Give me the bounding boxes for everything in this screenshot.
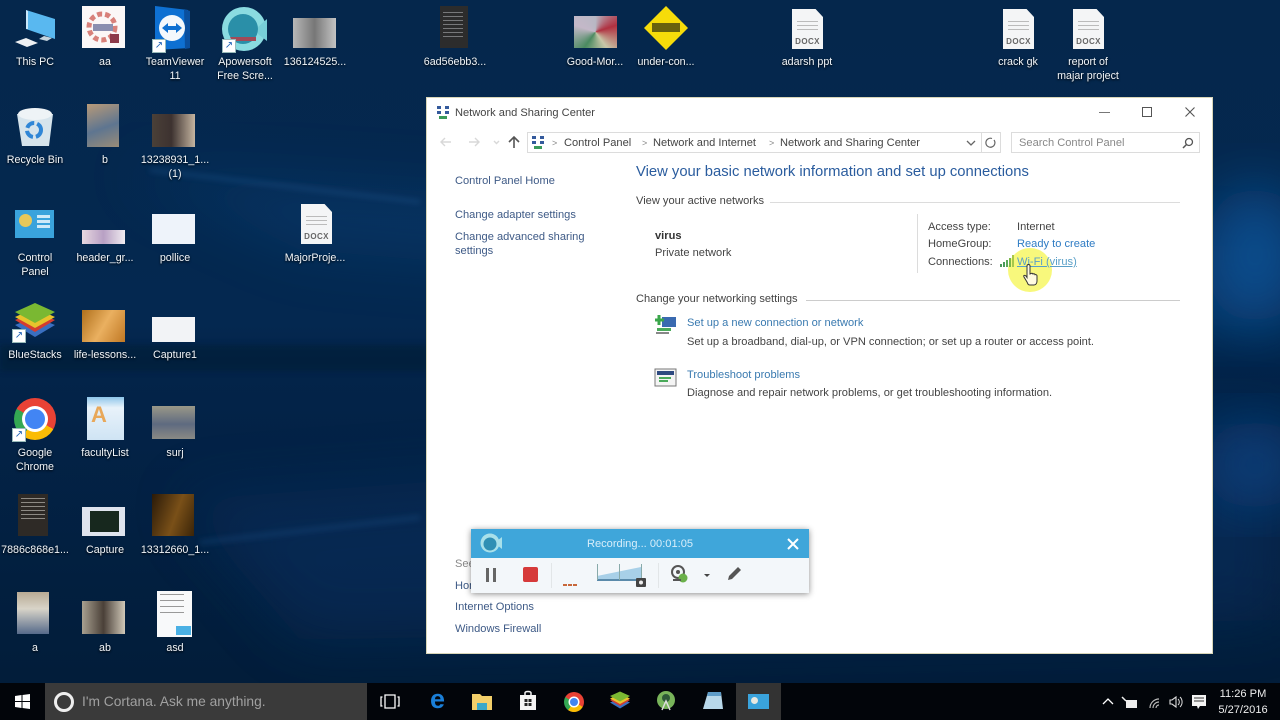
network details: Connections: (928, 256, 993, 268)
desktop icon: pollice screenshot: pollice (160, 252, 190, 264)
desktop icon: 13238931 photo (141, 114, 209, 181)
cursor highlight (1008, 248, 1052, 292)
see also links: Windows Firewall (455, 623, 541, 635)
side navigation links: Change advanced sharing (455, 231, 585, 243)
desktop icon: Recycle Bin (6, 108, 64, 167)
desktop icon: Apowersoft Free Screen (216, 7, 273, 82)
desktop icon: Control Panel: Panel (21, 266, 49, 278)
icon: troubleshoot (654, 368, 676, 386)
side navigation links: Control Panel Home (455, 175, 555, 187)
setting: troubleshoot problems: Diagnose and repair network problems, or get troubleshooting information. (687, 387, 1052, 399)
icon: bluestacks (610, 691, 630, 711)
desktop icon: 13238931 photo: 13238931_1... (141, 154, 209, 166)
desktop icon: Google Chrome: ↗ (15, 429, 23, 440)
side navigation links (455, 175, 585, 257)
address bar breadcrumb: Control Panel (564, 137, 631, 149)
search box (1011, 132, 1200, 153)
desktop icon: header_gr image (76, 230, 134, 266)
address bar breadcrumb: > (769, 138, 774, 148)
icon: edge browser: e (430, 684, 445, 714)
address bar breadcrumb: Network and Sharing Center (780, 137, 920, 149)
desktop icon: Control Panel: Control (18, 252, 52, 264)
desktop icon: TeamViewer 11: ↗ (155, 40, 163, 51)
desktop icon: facultyList: A (91, 402, 107, 427)
icon: file explorer (472, 692, 492, 710)
setting: set up a new connection (687, 317, 1094, 348)
desktop icon: facultyList (80, 397, 129, 460)
recorder title bar (471, 529, 809, 558)
taskbar (0, 683, 1280, 720)
network details (917, 214, 1095, 273)
icon: store (519, 690, 537, 711)
desktop icon: Good-Morning image (566, 16, 623, 68)
desktop icon: adarsh ppt document: DOCX (795, 37, 820, 46)
desktop icon: Apowersoft Free Screen: Free Scre... (217, 70, 273, 82)
desktop icon: Recycle Bin: Recycle Bin (7, 154, 63, 166)
desktop icon: report of majar project document: DOCX (1076, 37, 1101, 46)
section heading: active networks: View your active networks (636, 195, 764, 207)
desktop icon: life-lessons image: life-lessons... (74, 349, 136, 361)
active network name: virus (655, 230, 682, 242)
desktop icon: a photo: a (32, 642, 38, 654)
desktop icon: Capture screenshot: Capture (86, 544, 124, 556)
desktop icon: This PC: This PC (16, 56, 54, 68)
icon: task view (380, 694, 400, 709)
see also links: See also (455, 558, 498, 570)
desktop icon: 13312660 image (141, 494, 209, 557)
desktop icon: a photo (17, 592, 49, 654)
address bar breadcrumb: Network and Internet (653, 137, 756, 149)
desktop icon: BlueStacks (8, 303, 62, 361)
see also links (455, 554, 605, 636)
icon: control panel active task (736, 683, 781, 720)
side navigation links: Change adapter settings (455, 209, 576, 221)
desktop icon: ab photo: ab (99, 642, 111, 654)
desktop icon: BlueStacks: BlueStacks (8, 349, 62, 361)
desktop icon: Capture1 screenshot: Capture1 (153, 349, 197, 361)
desktop icon: Capture screenshot (82, 507, 125, 557)
side navigation links: settings (455, 245, 493, 257)
icon: notes app (702, 691, 723, 711)
desktop icon: 136124525 photo (284, 18, 346, 68)
desktop icon: 6ad56ebb3 image (423, 6, 486, 68)
see also links: HomeGroup (455, 580, 515, 592)
desktop icon: adarsh ppt document (781, 9, 832, 69)
network details: Ready to create (1017, 238, 1095, 250)
search box: Search Control Panel (1019, 137, 1124, 149)
clock: 5/27/2016 (1218, 704, 1268, 716)
panel: Network and Sharing Center window (426, 97, 1213, 654)
setting: troubleshoot problems (687, 369, 1052, 399)
network details: Internet (1017, 221, 1055, 233)
desktop icon: under-construction sign (637, 6, 695, 68)
desktop icon: asd document (157, 591, 192, 654)
recorder controls (471, 558, 809, 593)
desktop icon: TeamViewer 11: TeamViewer (146, 56, 204, 68)
desktop icon: crack gk document (998, 9, 1038, 70)
desktop icon: facultyList: facultyList (81, 447, 129, 459)
desktop icon: 136124525 photo: 136124525... (284, 56, 346, 68)
desktop icon: crack gk document: DOCX (1006, 37, 1031, 46)
address bar breadcrumb: > (552, 138, 557, 148)
desktop icon: adarsh ppt document: adarsh ppt (782, 56, 832, 68)
icon: start button (15, 694, 30, 709)
desktop icon: 7886c868e1 image: 7886c868e1... (1, 544, 69, 556)
setting: troubleshoot problems: Troubleshoot problems (687, 369, 800, 381)
network details: HomeGroup: (928, 238, 992, 250)
address bar breadcrumb (527, 132, 1001, 153)
desktop icon: Apowersoft Free Screen: Apowersoft (218, 56, 272, 68)
desktop icon: BlueStacks: ↗ (15, 330, 23, 341)
desktop icon: b photo (87, 104, 119, 166)
desktop icon: Google Chrome: Chrome (16, 461, 54, 473)
desktop icon: under-construction sign: under-con... (637, 56, 695, 68)
icon: wifi signal (1000, 255, 1014, 267)
desktop icon: header_gr image: header_gr... (76, 252, 134, 264)
network details: Access type: (928, 221, 991, 233)
desktop icon: 13238931 photo: (1) (168, 168, 182, 180)
desktop icon: surj photo: surj (166, 447, 184, 459)
desktop icon: life-lessons image (74, 310, 136, 361)
desktop icon: 13312660 image: 13312660_1... (141, 544, 209, 556)
see also links: Internet Options (455, 601, 534, 613)
desktop icon: MajorProject document: DOCX (304, 232, 329, 241)
desktop icon: crack gk document: crack gk (998, 56, 1038, 68)
desktop icon: TeamViewer 11: 11 (169, 70, 181, 82)
icon: new connection (655, 315, 676, 334)
desktop icon: b photo: b (102, 154, 108, 166)
desktop icon: ab photo (82, 601, 125, 654)
address bar breadcrumb: > (642, 138, 647, 148)
desktop icon: asd document: asd (166, 642, 184, 654)
cortana search box: I'm Cortana. Ask me anything. (82, 694, 266, 709)
navigation arrows (440, 136, 520, 148)
desktop icon: 6ad56ebb3 image: 6ad56ebb3... (424, 56, 486, 68)
desktop icon: report of majar project document: report of (1068, 56, 1108, 68)
setting: set up a new connection: Set up a broadband, dial-up, or VPN connection; or set up a router or access point. (687, 336, 1094, 348)
desktop icon: Google Chrome: Google (18, 447, 52, 459)
active network name (655, 230, 732, 259)
section heading: networking settings: Change your networking settings (636, 293, 798, 305)
desktop icon: surj photo (152, 406, 195, 460)
desktop icon: aa (82, 6, 125, 68)
window title with icon: Network and Sharing Center (455, 107, 595, 119)
desktop icon: Good-Morning image: Good-Mor... (567, 56, 623, 68)
window controls (1099, 107, 1195, 117)
icon: hand cursor (1023, 264, 1038, 286)
panel: screen recorder toolbar (471, 529, 809, 593)
desktop icon: TeamViewer 11 (146, 6, 204, 82)
system tray icons (1100, 693, 1210, 711)
desktop icon: aa: aa (99, 56, 111, 68)
desktop icon: 7886c868e1 image (1, 494, 69, 556)
desktop icon: report of majar project document (1056, 9, 1120, 84)
desktop icon: MajorProject document: MajorProje... (285, 252, 345, 264)
desktop icon: MajorProject document (284, 204, 345, 266)
desktop icon: This PC (15, 10, 55, 68)
wifi link: Wi-Fi (virus) (1017, 256, 1077, 268)
desktop icon: report of majar project document: majar project (1057, 70, 1119, 82)
desktop icon: pollice screenshot (152, 214, 195, 265)
main heading: View your basic network information and set up connections (636, 164, 1029, 180)
desktop icon: Capture1 screenshot (152, 317, 197, 362)
recorder title bar: Recording... 00:01:05 (587, 538, 693, 550)
active network name: Private network (655, 247, 731, 259)
clock: 11:26 PM (1220, 688, 1266, 700)
icon: chrome (564, 692, 584, 712)
setting: set up a new connection: Set up a new connection or network (687, 317, 863, 329)
icon: android studio (656, 690, 676, 712)
desktop icon: Google Chrome (12, 398, 56, 473)
clock (1210, 685, 1276, 717)
cortana search box (45, 683, 367, 720)
desktop icon: Apowersoft Free Screen: ↗ (225, 40, 233, 51)
desktop icon: Control Panel (15, 210, 54, 278)
